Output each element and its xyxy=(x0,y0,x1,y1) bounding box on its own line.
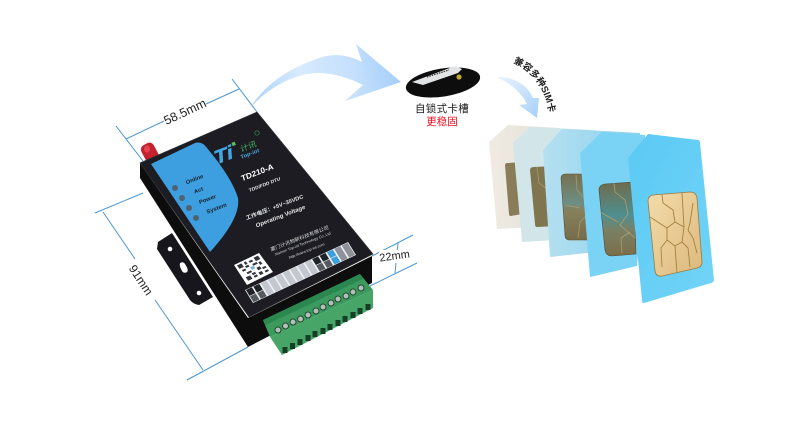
device side face xyxy=(140,163,248,347)
icon: SIM card slot xyxy=(404,63,482,102)
brand logo: Top-iot xyxy=(240,148,260,161)
SIM cards stack xyxy=(489,125,714,303)
terminal sockets xyxy=(285,304,368,353)
device top face xyxy=(140,112,373,317)
status labels xyxy=(185,174,227,216)
SIM card 4 xyxy=(580,132,645,277)
SIM chip xyxy=(648,192,702,276)
SIM card 1 xyxy=(489,125,560,229)
slot caption xyxy=(415,102,469,128)
SIM card 5 xyxy=(628,134,714,303)
status labels: Online xyxy=(185,174,205,186)
status labels: Act xyxy=(193,187,204,196)
dimension: height 91mm xyxy=(95,193,248,380)
dimension: depth 22mm xyxy=(370,235,417,286)
status labels: System xyxy=(206,202,227,216)
blue front panel xyxy=(151,143,238,252)
operating voltage: 工作电压：+5V~35VDC xyxy=(245,192,304,222)
arrow: small curved blue xyxy=(496,77,539,118)
brand logo: 计讯 xyxy=(239,138,257,154)
brand logo: Ti xyxy=(214,141,233,170)
company text: Xiamen Top-iot Technology Co.,Ltd xyxy=(274,231,331,257)
model subtitle: TDD/FDD DTU xyxy=(248,176,282,194)
dimension: width 58.5mm xyxy=(116,79,257,161)
status LEDs xyxy=(172,185,199,221)
dimension: height 91mm: 91mm xyxy=(126,262,156,298)
slot caption: 自锁式卡槽 xyxy=(415,102,469,115)
device front face xyxy=(248,256,372,347)
terminal label strip xyxy=(245,242,356,303)
slot caption: 更稳固 xyxy=(426,115,458,128)
dimension: depth 22mm: 22mm xyxy=(379,248,411,265)
mounting bracket xyxy=(157,233,213,305)
dimension: width 58.5mm: 58.5mm xyxy=(162,96,208,128)
curved caption: compatible SIM cards: 兼容多种SIM卡 xyxy=(514,56,556,112)
brand logo xyxy=(214,131,260,170)
green terminal block xyxy=(263,274,373,355)
status labels: Power xyxy=(199,194,218,206)
company text: 厦门计讯物联科技有限公司 xyxy=(270,224,329,253)
terminal front surface xyxy=(270,290,373,355)
icon: red antenna xyxy=(139,141,161,165)
terminal screws xyxy=(275,285,364,333)
SIM card 3 xyxy=(543,129,640,257)
model name: TD210-A xyxy=(240,162,275,183)
device: DTU body xyxy=(140,112,373,347)
arrow: large curved blue xyxy=(250,44,401,108)
terminal back rim xyxy=(263,274,363,325)
operating voltage: Operating Voltage xyxy=(255,205,307,229)
company text: http://www.top-iot.com xyxy=(288,242,325,260)
SIM card 2 xyxy=(513,127,595,242)
QR code xyxy=(234,253,273,285)
terminal top surface xyxy=(263,274,373,337)
